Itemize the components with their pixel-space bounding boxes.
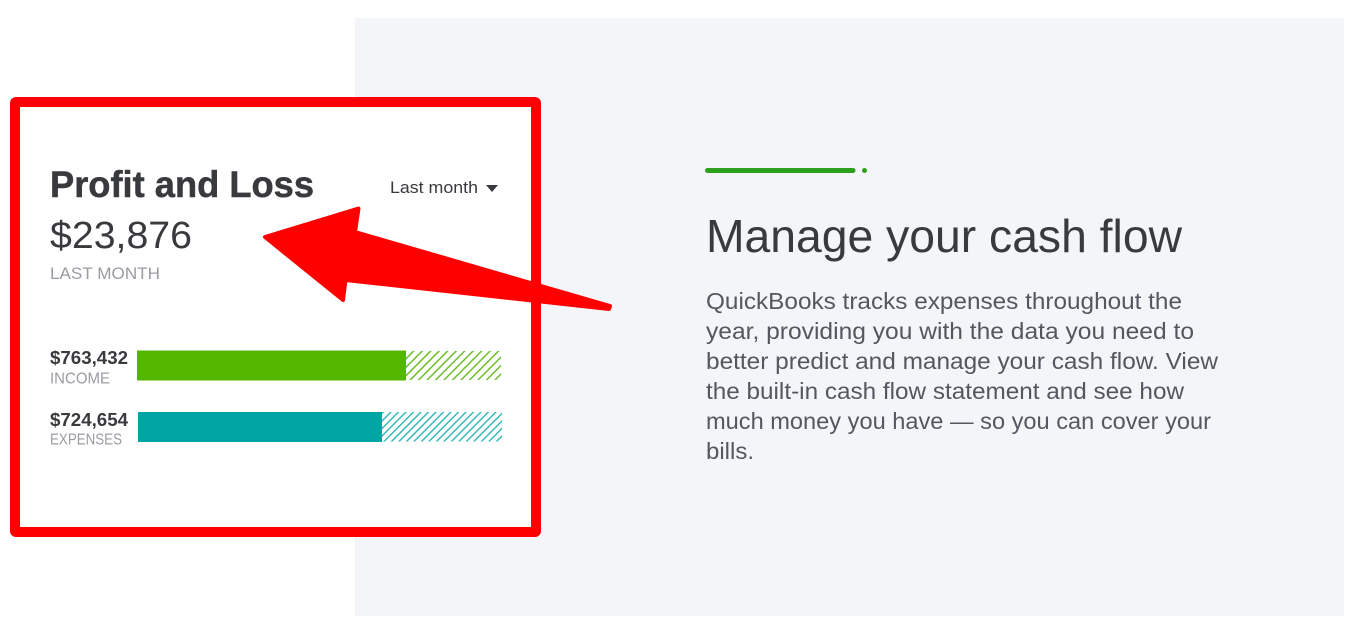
income row: INCOME <box>50 370 110 388</box>
body text: better predict and manage your cash flow. View <box>706 348 1218 374</box>
expenses row: EXPENSES <box>50 432 122 448</box>
body text: bills. <box>706 438 754 464</box>
body text <box>706 288 1218 464</box>
heading: manage your cash flow: Manage your cash flow <box>706 210 1182 262</box>
body text: the built-in cash flow statement and see how <box>706 378 1184 404</box>
body text: QuickBooks tracks expenses throughout the <box>706 288 1182 314</box>
accent line <box>705 168 867 173</box>
expenses row: $724,654 <box>50 410 128 430</box>
expenses row <box>50 410 502 448</box>
period label: LAST MONTH <box>50 264 160 283</box>
income row <box>50 348 501 388</box>
arrow <box>265 208 610 309</box>
body text: year, providing you with the data you need to <box>706 318 1194 344</box>
income row: $763,432 <box>50 348 128 368</box>
panel: profit and loss card <box>15 102 536 532</box>
heading: profit and loss: Profit and Loss <box>50 164 314 205</box>
panel: grey background <box>355 18 1344 616</box>
profit amount: $23,876 <box>50 215 192 257</box>
period selector: Last month <box>390 179 478 197</box>
body text: much money you have — so you can cover your <box>706 408 1211 434</box>
